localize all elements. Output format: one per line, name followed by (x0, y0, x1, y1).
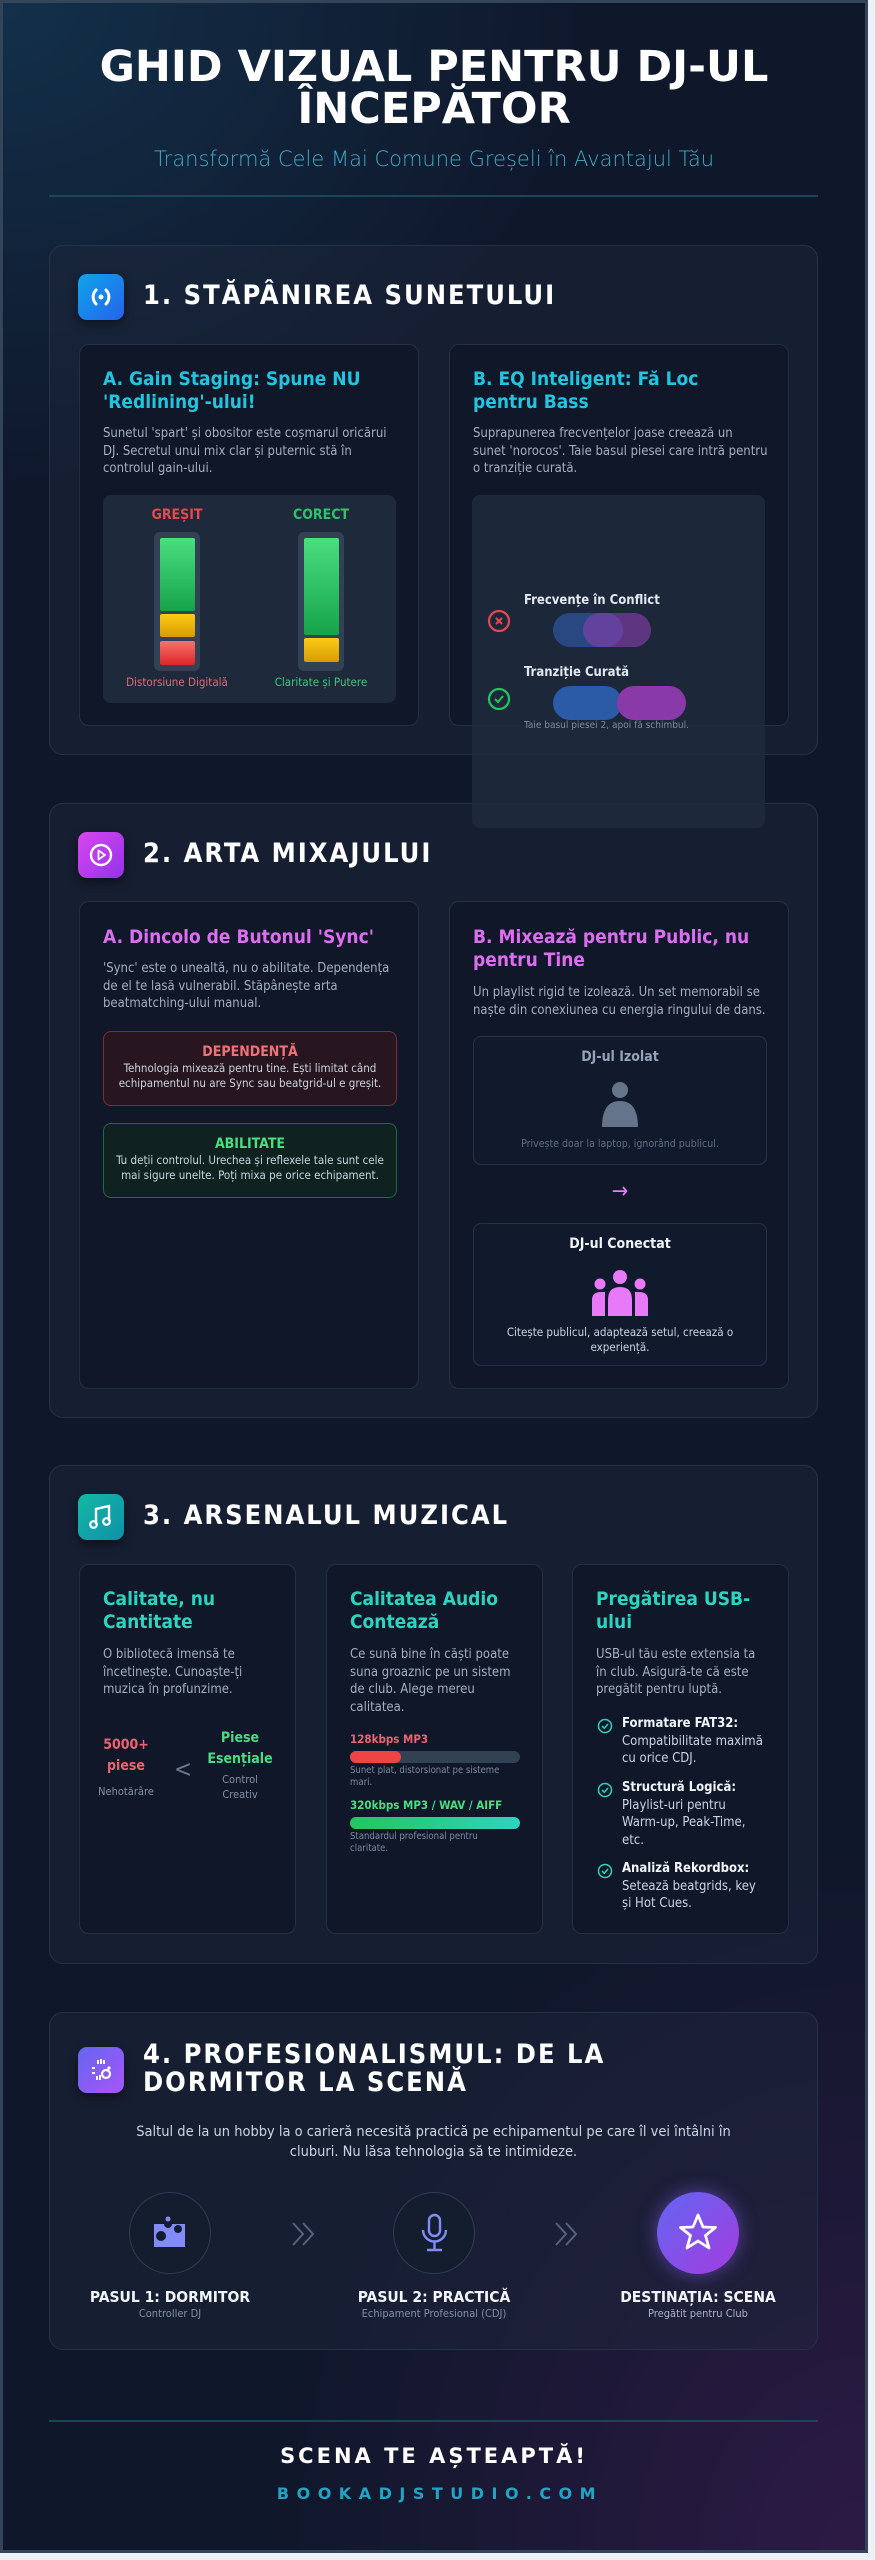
heading: ului (596, 1611, 632, 1633)
step 1 (90, 2192, 250, 2320)
step 1: PASUL 1: DORMITOR (90, 2288, 250, 2306)
icon: sparkle (78, 2047, 124, 2093)
bar chart: bitrate: mari. (350, 1776, 372, 1788)
text (102, 1647, 242, 1697)
callout: abilitate: mai sigure unelte. Poți mixa pe orice echipament. (121, 1168, 379, 1182)
panel: section 1 (49, 245, 818, 755)
heading: section 4 (143, 2039, 605, 2098)
bar chart: bitrate: 320kbps MP3 / WAV / AIFF (350, 1798, 502, 1812)
EQ diagram: Taie basul piesei 2, apoi fă schimbul. (524, 720, 689, 731)
text (103, 426, 386, 476)
footer url: BOOKADJSTUDIO.COM (277, 2484, 603, 2503)
text: suna groaznic pe un sistem (350, 1664, 511, 1680)
panel: section 3 (49, 1465, 818, 1964)
text: sunet 'norocos'. Taie basul piesei care intră pentru (473, 444, 768, 458)
title: ÎNCEPĂTOR (297, 84, 571, 134)
panel: public (449, 901, 789, 1389)
checklist (598, 1716, 763, 1911)
icon: music (78, 1494, 124, 1540)
text (473, 985, 766, 1018)
comparison: Creativ (222, 1788, 258, 1801)
bar chart: bitrate: Sunet plat, distorsionat pe sisteme (350, 1765, 499, 1776)
comparison: 5000+ (103, 1737, 149, 1753)
text (103, 961, 389, 1011)
text: controlul gain-ului. (103, 461, 212, 476)
heading B: pentru Bass (473, 391, 589, 413)
step 3 (620, 2181, 776, 2320)
bar chart: bitrate: 128kbps MP3 (350, 1732, 428, 1746)
title: GHID VIZUAL PENTRU DJ-UL (100, 42, 768, 92)
footer heading: SCENA TE AȘTEAPTĂ! (280, 2444, 588, 2468)
text: USB-ul tău este extensia ta (596, 1647, 755, 1662)
step 3: DESTINAȚIA: SCENA (620, 2288, 776, 2306)
panel: section 4 (49, 2012, 818, 2350)
icon: play (78, 832, 124, 878)
text: calitatea. (350, 1700, 405, 1714)
text: Sunetul 'spart' și obositor este coșmarul oricărui (103, 426, 386, 441)
heading B (473, 926, 749, 971)
text: Ce sună bine în căști poate (350, 1647, 509, 1662)
text: pregătit pentru luptă. (596, 1682, 722, 1697)
text: de el te lasă vulnerabil. Stăpânește arta (103, 978, 338, 994)
arrow 2 (555, 2222, 578, 2246)
checklist: Analiză Rekordbox: (622, 1861, 749, 1876)
panel: quality (79, 1564, 296, 1934)
checklist: Formatare FAT32: (622, 1716, 738, 1731)
heading: section 1: 1. STĂPÂNIREA SUNETULUI (143, 280, 556, 311)
heading B: pentru Tine (473, 949, 585, 971)
icon: check (488, 688, 510, 710)
text: încetinește. Cunoaște-ți (103, 1664, 242, 1680)
icon: microphone (393, 2192, 475, 2274)
box: conectat: DJ-ul Conectat (569, 1236, 671, 1252)
text: Suprapunerea frecvențelor joase creează un (473, 426, 733, 441)
heading B: B. EQ Inteligent: Fă Loc (473, 368, 698, 390)
heading: section 4: 4. PROFESIONALISMUL: DE LA (143, 2039, 605, 2070)
text: muzica în profunzime. (103, 1682, 233, 1697)
checklist: Compatibilitate maximă (622, 1734, 763, 1748)
text: intro: Saltul de la un hobby la o carieră necesită practică pe echipamentul pe care îl vei întâlni în (136, 2124, 731, 2140)
bar chart: bitrate: Standardul profesional pentru (350, 1831, 478, 1842)
heading: section 4: DORMITOR LA SCENĂ (143, 2067, 468, 2098)
panel: section 2 (49, 803, 818, 1418)
text: intro (136, 2124, 731, 2160)
panel: sync (79, 901, 419, 1389)
meter chart: Distorsiune Digitală (126, 675, 228, 689)
heading: Contează (350, 1611, 439, 1633)
text: Un playlist rigid te izolează. Un set memorabil se (473, 985, 760, 1000)
heading (103, 1588, 215, 1633)
heading A: A. Gain Staging: Spune NU (103, 368, 360, 390)
heading: Calitatea Audio (350, 1588, 498, 1610)
icon: sound (78, 274, 124, 320)
checklist: cu orice CDJ. (622, 1751, 696, 1766)
text: O bibliotecă imensă te (103, 1647, 235, 1662)
text: 'Sync' este o unealtă, nu o abilitate. Dependența (103, 961, 389, 976)
checklist: Structură Logică: (622, 1780, 736, 1795)
text: de club. Alege mereu (350, 1682, 475, 1697)
title (100, 42, 768, 134)
panel: gain staging (79, 344, 419, 726)
heading (596, 1588, 750, 1633)
text: DJ. Secretul unui mix clar și puternic stă în (103, 444, 352, 458)
heading (350, 1588, 498, 1633)
box: izolat (473, 1036, 767, 1165)
step 1: Controller DJ (139, 2307, 201, 2320)
callout: abilitate (103, 1123, 397, 1198)
heading: Pregătirea USB- (596, 1588, 750, 1610)
heading B: B. Mixează pentru Public, nu (473, 926, 749, 948)
callout: abilitate: Tu deții controlul. Urechea și reflexele tale sunt cele (116, 1153, 384, 1167)
icon: controller (129, 2192, 211, 2274)
EQ diagram: Frecvențe în Conflict (524, 593, 660, 608)
arrow 1 (292, 2222, 314, 2246)
meter chart: CORECT (293, 507, 349, 523)
bar chart: bitrate (350, 1732, 520, 1854)
comparison: Nehotărâre (98, 1785, 154, 1798)
heading A: A. Dincolo de Butonul 'Sync' (103, 926, 374, 948)
comparison: piese (107, 1758, 145, 1774)
box: conectat (473, 1223, 767, 1366)
box: izolat: DJ-ul Izolat (581, 1049, 659, 1065)
heading A: 'Redlining'-ului! (103, 391, 256, 413)
icon: person (602, 1082, 638, 1127)
step 2: PASUL 2: PRACTICĂ (358, 2288, 510, 2306)
comparison: < (174, 1755, 192, 1783)
text (473, 426, 768, 476)
heading: Cantitate (103, 1611, 193, 1633)
heading B (473, 368, 698, 413)
arrow: → (612, 1179, 628, 1204)
text (596, 1647, 755, 1697)
heading: section 2: 2. ARTA MIXAJULUI (143, 838, 432, 869)
callout: dependenta: DEPENDENȚĂ (202, 1044, 298, 1060)
box: conectat: experiență. (591, 1340, 649, 1354)
box: conectat: Citește publicul, adaptează setul, creează o (507, 1325, 733, 1339)
icon: star (657, 2192, 739, 2274)
EQ diagram: Tranziție Curată (524, 665, 629, 680)
step 3: Pregătit pentru Club (648, 2307, 748, 2320)
meter chart (103, 495, 396, 703)
text: intro: cluburi. Nu lăsa tehnologia să te intimideze. (290, 2144, 577, 2160)
comparison (98, 1730, 273, 1801)
panel: EQ (449, 344, 789, 726)
text: beatmatching-ului manual. (103, 996, 261, 1011)
heading: Calitate, nu (103, 1588, 215, 1610)
meter chart: Claritate și Putere (275, 675, 367, 689)
step 2 (358, 2192, 510, 2320)
panel: audio quality (326, 1564, 543, 1934)
checklist: etc. (622, 1832, 644, 1848)
icon: group (592, 1270, 648, 1316)
step 2: Echipament Profesional (CDJ) (362, 2307, 506, 2320)
icon: x (488, 610, 510, 632)
callout: dependenta: echipamentul nu are Sync sau beatgrid-ul e greșit. (119, 1076, 381, 1090)
checklist: Setează beatgrids, key (622, 1878, 756, 1894)
EQ diagram (472, 495, 765, 828)
comparison: Piese (221, 1730, 259, 1746)
meter chart: GREȘIT (152, 507, 202, 523)
callout: dependenta (103, 1031, 397, 1106)
text (350, 1647, 511, 1714)
comparison: Esențiale (207, 1751, 273, 1767)
text: naște din conexiunea cu energia ringului de dans. (473, 1002, 766, 1018)
callout: abilitate: ABILITATE (215, 1136, 285, 1152)
text: o tranziție curată. (473, 461, 577, 476)
comparison: Control (222, 1773, 258, 1786)
panel: USB (572, 1564, 789, 1934)
heading A (103, 368, 360, 413)
box: izolat: Privește doar la laptop, ignorând publicul. (521, 1138, 719, 1150)
bar chart: bitrate: claritate. (350, 1842, 388, 1854)
checklist: Warm-up, Peak-Time, (622, 1815, 745, 1830)
checklist: Playlist-uri pentru (622, 1798, 726, 1812)
subtitle: Transformă Cele Mai Comune Greșeli în Avantajul Tău (154, 147, 714, 171)
checklist: și Hot Cues. (622, 1896, 692, 1911)
callout: dependenta: Tehnologia mixează pentru tine. Ești limitat când (124, 1061, 376, 1075)
text: în club. Asigură-te că este (596, 1664, 749, 1680)
heading: section 3: 3. ARSENALUL MUZICAL (143, 1500, 509, 1531)
